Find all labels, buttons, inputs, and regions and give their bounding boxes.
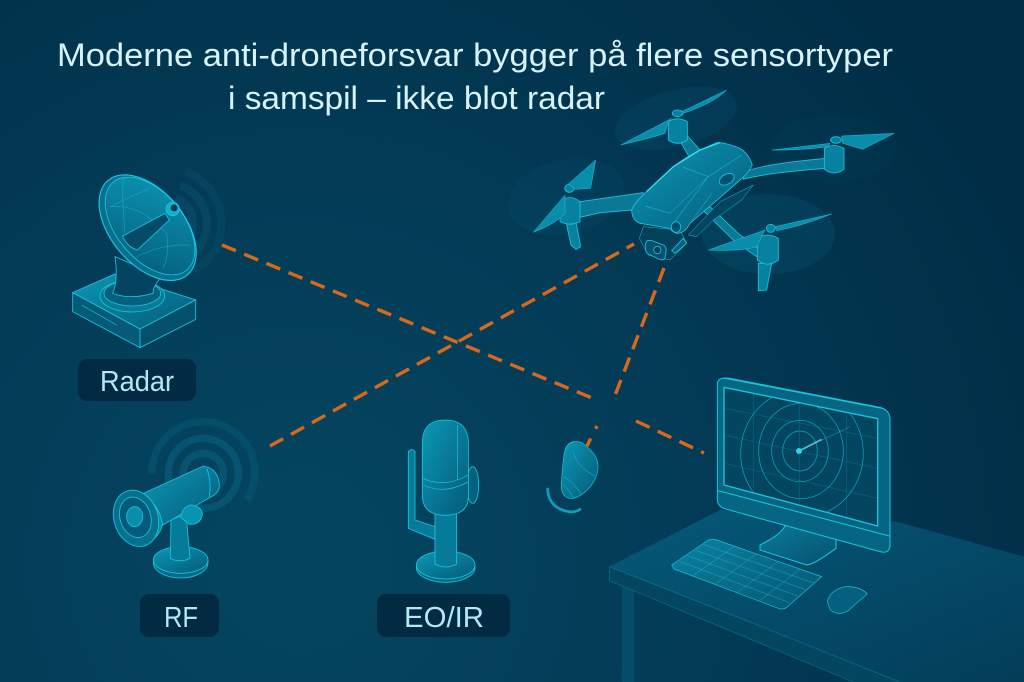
signal waves	[176, 172, 222, 271]
base	[73, 274, 196, 348]
stand	[153, 513, 208, 578]
label: Radar: Radar	[100, 366, 174, 398]
connection lines	[222, 244, 704, 453]
monitor screen	[724, 387, 878, 526]
propeller discs	[500, 75, 897, 274]
dish	[80, 157, 215, 298]
icon: radar dish	[73, 157, 222, 348]
monitor casing	[717, 378, 890, 552]
knob	[181, 505, 202, 524]
label: EO/IR	[377, 594, 510, 637]
side knob	[467, 467, 479, 503]
label: RF	[140, 594, 219, 637]
main body	[632, 143, 752, 233]
drone	[500, 75, 897, 291]
label: EO/IR: EO/IR	[404, 602, 484, 634]
telescope tube	[143, 466, 219, 527]
propeller blades	[533, 90, 894, 250]
title: Moderne anti-droneforsvar bygger på flere sensortyper	[57, 37, 893, 73]
pedestal	[113, 257, 162, 297]
signal waves	[152, 422, 255, 508]
lens	[106, 484, 166, 552]
icon: EO/IR sensor	[408, 420, 479, 582]
lower body	[688, 185, 753, 237]
label: Radar	[78, 359, 196, 401]
mouse	[827, 587, 867, 613]
icon: RF sensor	[106, 422, 255, 578]
title	[57, 37, 893, 116]
antenna	[408, 449, 435, 539]
desk	[609, 510, 1024, 682]
motors and legs	[560, 110, 844, 291]
arms	[580, 135, 827, 257]
housing	[422, 420, 468, 515]
icon: small sensor	[548, 441, 598, 512]
label: RF: RF	[164, 602, 198, 634]
monitor with radar screen	[672, 378, 890, 613]
title: i samspil – ikke blot radar	[228, 80, 605, 116]
base	[416, 551, 475, 582]
keyboard	[672, 539, 822, 609]
monitor stand	[760, 525, 836, 565]
stem	[435, 513, 457, 567]
gimbal and camera	[639, 227, 687, 260]
